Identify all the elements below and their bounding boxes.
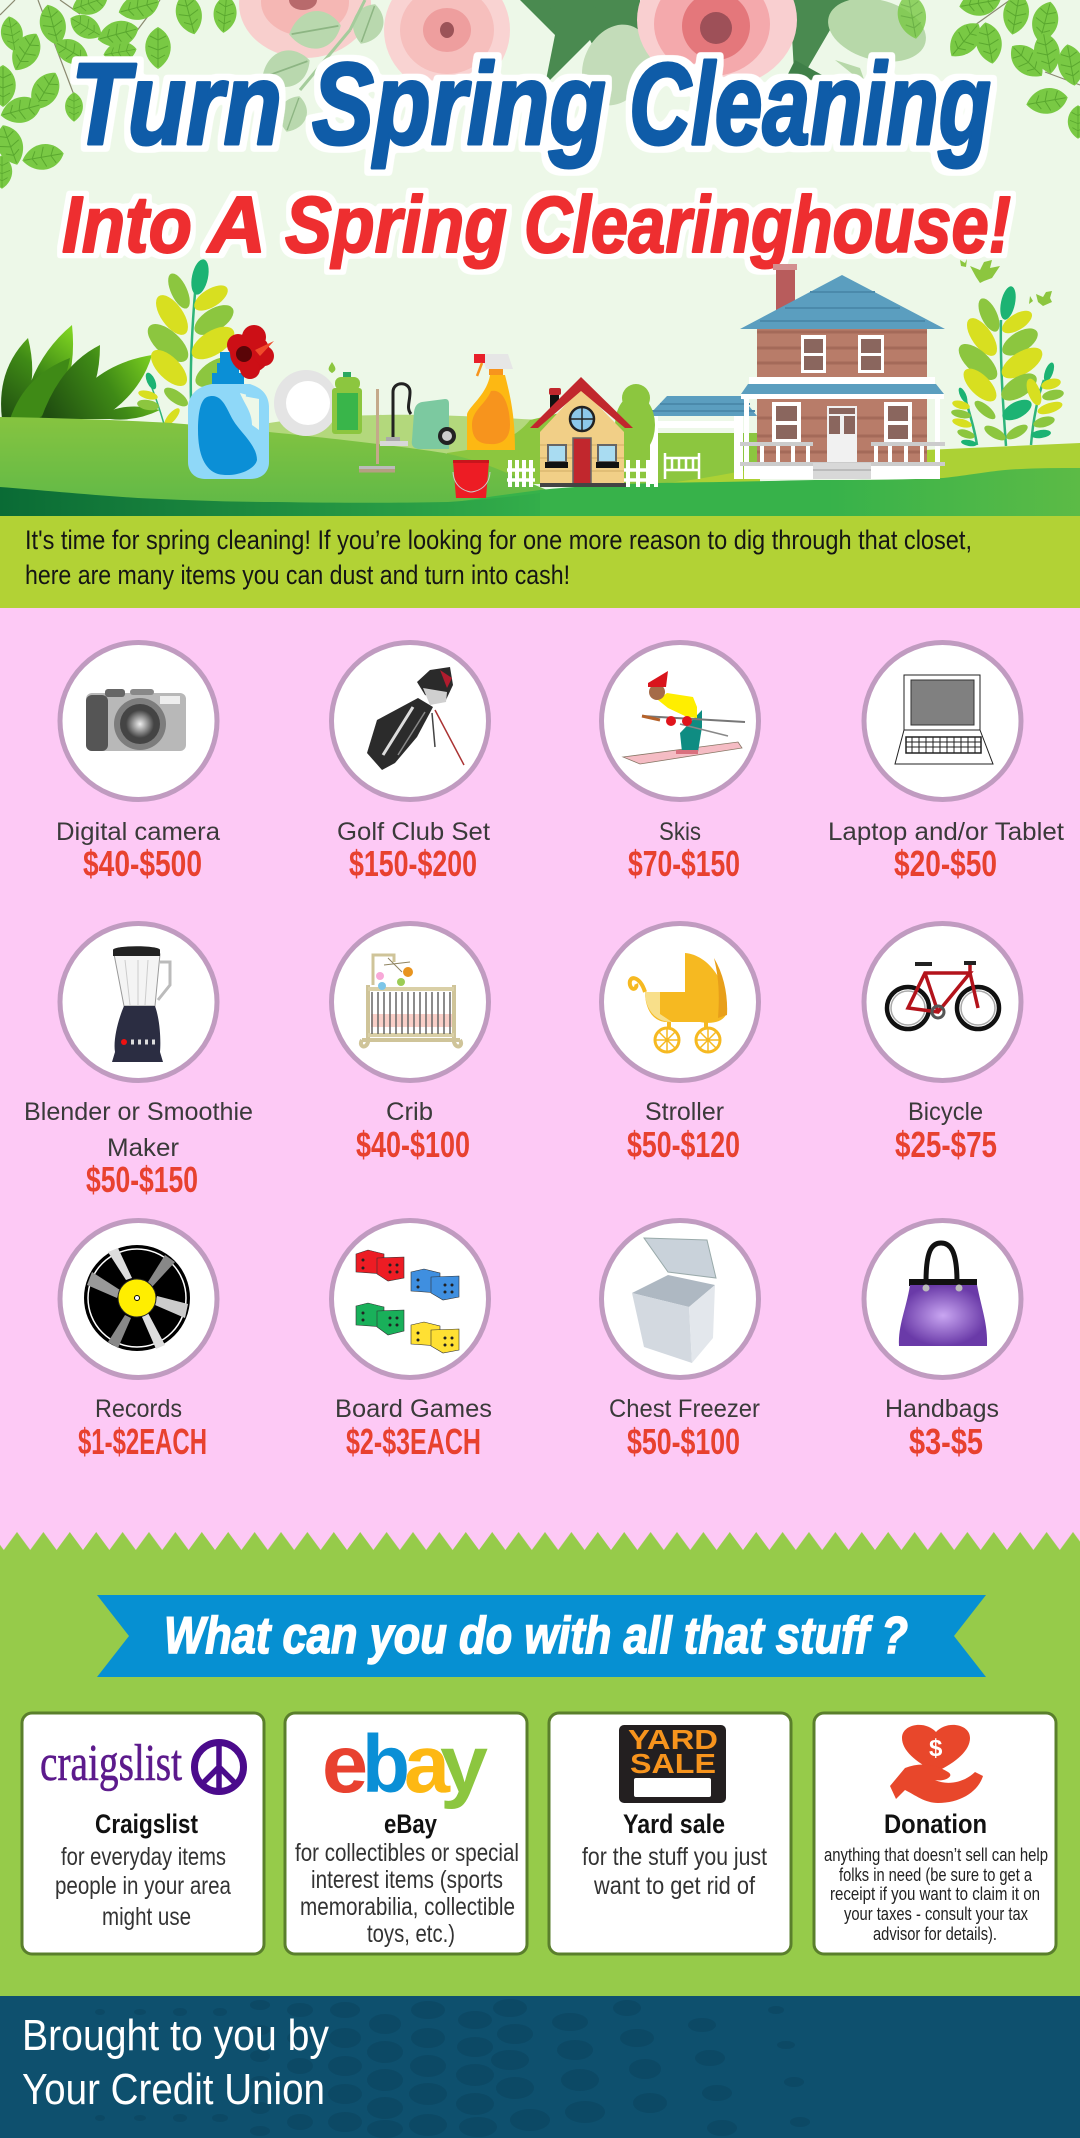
icon: vinyl record xyxy=(84,1245,190,1351)
icon: heart in hand: $ xyxy=(929,1735,943,1762)
price: $40-$500 xyxy=(83,843,202,884)
card text: for the stuff you just xyxy=(582,1843,767,1871)
red flower xyxy=(227,325,274,379)
label: Blender or Smoothie xyxy=(24,1098,253,1126)
title line 1 xyxy=(71,39,991,169)
illustration: fern left xyxy=(1,325,160,420)
price: $50-$120 xyxy=(627,1124,740,1165)
illustration: cleaning supplies xyxy=(188,325,515,498)
footer xyxy=(0,1996,1080,2138)
title line 2: Spring xyxy=(285,180,507,269)
logo: ebay: b xyxy=(362,1719,410,1810)
card text xyxy=(824,1845,1048,1944)
logo: yard sale sign xyxy=(619,1724,726,1803)
item: stroller xyxy=(602,924,758,1165)
price: $1-$2EACH xyxy=(78,1421,207,1462)
logo: ebay: y xyxy=(440,1719,488,1810)
intro band: It's time for spring cleaning! If you’re looking for one more reason to dig through that closet, xyxy=(25,525,972,555)
item: records xyxy=(60,1220,217,1462)
illustration: large house xyxy=(740,264,945,479)
price: $40-$100 xyxy=(356,1124,470,1165)
item: digital camera xyxy=(56,642,220,884)
bucket xyxy=(453,460,490,498)
illustration: left plant xyxy=(136,258,240,428)
price: $50-$100 xyxy=(627,1421,740,1462)
illustration: right plants xyxy=(950,285,1065,447)
card text: people in your area xyxy=(55,1872,231,1900)
illustration: rolling hills xyxy=(0,413,1080,516)
label: Bicycle xyxy=(908,1098,983,1126)
footer halftone dots xyxy=(95,1999,810,2138)
card text xyxy=(295,1839,519,1948)
card: donation xyxy=(814,1713,1056,1954)
label: Records xyxy=(95,1395,182,1423)
card: craigslist xyxy=(22,1713,264,1954)
label: Handbags xyxy=(885,1395,999,1423)
title line 1: Turn xyxy=(71,39,282,169)
title line 2: A xyxy=(206,180,266,269)
price: $20-$50 xyxy=(894,843,997,884)
item: crib xyxy=(332,924,488,1165)
title line 1: Spring xyxy=(312,39,606,169)
card title: Yard sale xyxy=(623,1809,725,1839)
spray bottle xyxy=(467,354,515,450)
icon: skier xyxy=(623,671,745,764)
footer: Your Credit Union xyxy=(22,2065,325,2114)
label: Crib xyxy=(386,1098,433,1126)
price: $150-$200 xyxy=(349,843,477,884)
title line 2: Into xyxy=(62,180,192,269)
card text: folks in need (be sure to get a xyxy=(839,1865,1033,1885)
card text: memorabilia, collectible xyxy=(300,1893,515,1921)
item: skis xyxy=(602,642,758,884)
vacuum cleaner xyxy=(380,384,456,449)
card text xyxy=(582,1843,767,1900)
icon: golf bag xyxy=(367,667,464,770)
label xyxy=(24,1098,253,1162)
card text: your taxes - consult your tax xyxy=(844,1904,1028,1924)
banner xyxy=(97,1595,986,1677)
card: yard sale xyxy=(549,1713,791,1954)
label: Chest Freezer xyxy=(609,1395,760,1423)
logo: yard sale sign: YARD xyxy=(628,1724,718,1755)
label: Laptop and/or Tablet xyxy=(828,818,1064,846)
banner: What can you do with all that stuff ? xyxy=(164,1607,908,1665)
intro band: here are many items you can dust and turn into cash! xyxy=(25,560,570,590)
item: board games xyxy=(332,1220,492,1462)
logo: ebay: a xyxy=(404,1719,451,1810)
icon: handbag xyxy=(899,1243,987,1346)
price: $25-$75 xyxy=(895,1124,997,1165)
decoration: roses xyxy=(239,0,797,136)
icon: dice xyxy=(356,1250,459,1353)
panel: items background xyxy=(0,608,1080,1550)
logo: yard sale sign: SALE xyxy=(630,1748,716,1779)
title line 2 xyxy=(62,180,1011,269)
card text: might use xyxy=(102,1903,191,1931)
card text: receipt if you want to claim it on xyxy=(830,1884,1040,1904)
price: $50-$150 xyxy=(86,1159,198,1200)
icon: chest freezer xyxy=(632,1238,716,1363)
icon: laptop xyxy=(895,675,993,764)
icon: bicycle xyxy=(887,963,999,1029)
icon: butterflies xyxy=(960,259,1052,306)
decoration: left leaf cluster xyxy=(0,0,238,189)
icon: camera xyxy=(86,689,186,751)
item: golf club set xyxy=(332,642,490,884)
icon: blender xyxy=(112,946,170,1062)
decoration: foliage behind roses xyxy=(520,0,933,117)
detergent bottle xyxy=(188,352,269,479)
item: handbags xyxy=(864,1220,1021,1462)
mop xyxy=(359,389,395,472)
item: chest freezer xyxy=(602,1220,760,1462)
card text: advisor for details). xyxy=(873,1924,997,1944)
zigzag divider xyxy=(0,1532,1080,1550)
illustration: carport and bench xyxy=(648,396,757,484)
logo: ebay: e xyxy=(322,1719,368,1810)
card text: for collectibles or special xyxy=(295,1839,519,1867)
label: Board Games xyxy=(335,1395,492,1423)
card text xyxy=(55,1843,231,1931)
icon: heart in hand xyxy=(890,1725,983,1803)
price: $2-$3EACH xyxy=(346,1421,481,1462)
label: Digital camera xyxy=(56,818,220,846)
plate xyxy=(274,370,338,436)
logo: ebay xyxy=(322,1719,488,1810)
item: blender xyxy=(24,924,253,1200)
card: ebay xyxy=(285,1713,527,1954)
decoration: right leaf cluster xyxy=(942,0,1080,139)
card text: for everyday items xyxy=(61,1843,226,1871)
background: header sky xyxy=(0,0,1080,516)
card title: Craigslist xyxy=(95,1809,198,1839)
item: laptop and/or tablet xyxy=(828,642,1064,884)
card text: interest items (sports xyxy=(311,1866,503,1894)
card title: Donation xyxy=(884,1809,987,1839)
logo: craigslist: craigslist xyxy=(40,1735,182,1792)
card text: toys, etc.) xyxy=(367,1920,455,1948)
intro band xyxy=(0,516,1080,608)
panel: what can you do xyxy=(0,1550,1080,1996)
footer: Brought to you by xyxy=(22,2011,329,2060)
card title: eBay xyxy=(384,1809,437,1839)
label: Golf Club Set xyxy=(337,818,490,846)
icon: stroller xyxy=(630,953,727,1052)
icon: crib xyxy=(361,955,461,1046)
label: Stroller xyxy=(645,1098,724,1126)
price: $70-$150 xyxy=(628,843,740,884)
illustration: small house xyxy=(507,377,658,487)
price: $3-$5 xyxy=(909,1421,983,1462)
dish soap xyxy=(329,362,362,434)
label: Maker xyxy=(107,1134,179,1162)
item: bicycle xyxy=(864,924,1021,1165)
label: Skis xyxy=(659,818,701,846)
card text: want to get rid of xyxy=(593,1872,755,1900)
